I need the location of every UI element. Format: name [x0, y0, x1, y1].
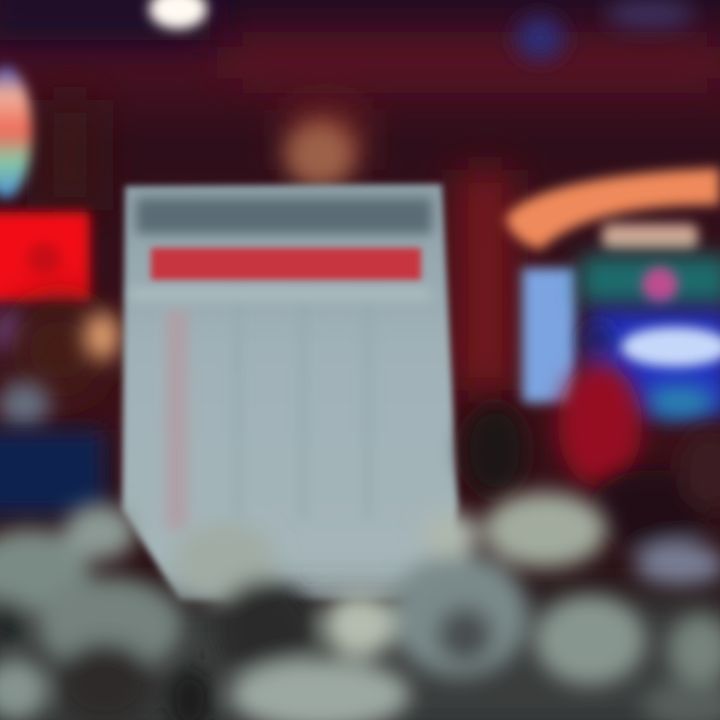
board title band — [136, 198, 432, 234]
left red sign — [0, 212, 90, 302]
board red banner — [151, 248, 421, 280]
orange curved stage sign — [505, 168, 720, 250]
board sheet — [122, 184, 458, 600]
board columns — [130, 290, 430, 530]
audience heads — [0, 492, 720, 720]
person behind the board — [286, 123, 354, 187]
ceiling blue lights — [516, 0, 695, 60]
dark figures right of board — [463, 404, 720, 587]
person in red — [558, 324, 642, 487]
left rainbow logo — [0, 66, 32, 198]
left side crowd and lights — [0, 300, 120, 515]
central board — [122, 184, 458, 600]
right video screen — [522, 255, 720, 418]
ceiling light — [149, 0, 207, 29]
